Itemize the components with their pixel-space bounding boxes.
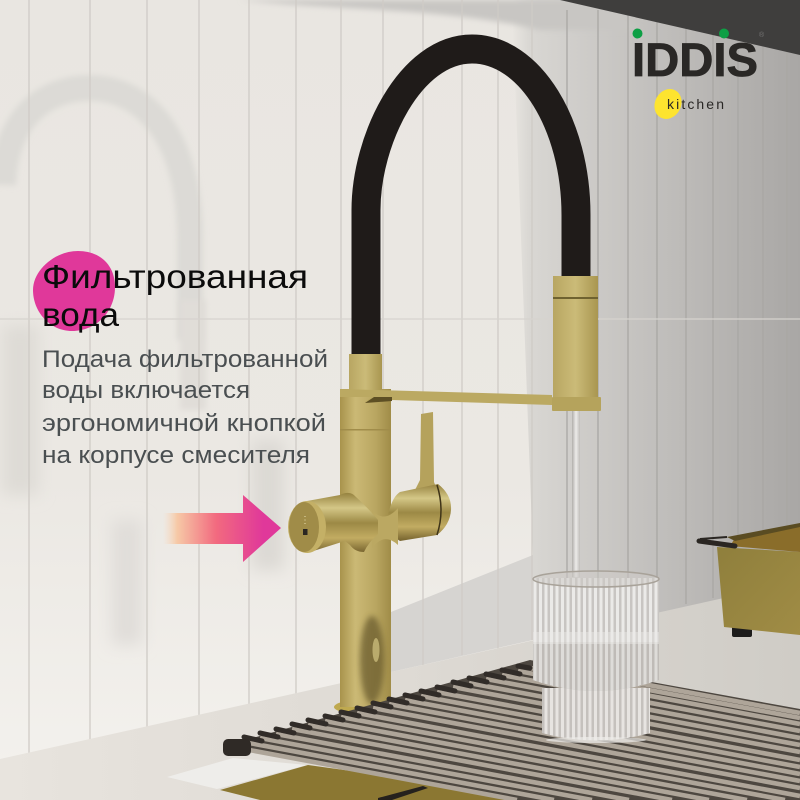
right handle [388, 484, 451, 541]
faucet column [340, 389, 391, 707]
logo: ® [759, 31, 765, 39]
black flexible hose [366, 49, 576, 356]
body text: воды включается [42, 377, 250, 404]
hose collar [349, 354, 382, 390]
heading: Фильтрованная [42, 258, 308, 295]
body text: Подача фильтрованной [42, 346, 328, 373]
arrow pointing at button [163, 495, 281, 562]
counter [0, 581, 800, 800]
side lever [414, 412, 437, 492]
filtered water button handle [288, 493, 398, 553]
body text: эргономичной кнопкой [42, 410, 326, 437]
faucet base ring [334, 700, 390, 714]
logo [632, 28, 765, 124]
logo: IDDIS [632, 33, 758, 86]
sprayer head [553, 276, 598, 397]
ceiling [560, 0, 800, 55]
spout arm [340, 389, 601, 411]
water stream [572, 411, 580, 577]
body text: на корпусе смесителя [42, 442, 310, 469]
ribbed glass [533, 571, 659, 743]
pink blob behind heading [33, 251, 115, 331]
tray on counter [699, 523, 800, 637]
heading: вода [42, 296, 120, 333]
sink [167, 758, 560, 800]
drying mat [223, 660, 800, 800]
logo: kitchen [667, 96, 724, 112]
